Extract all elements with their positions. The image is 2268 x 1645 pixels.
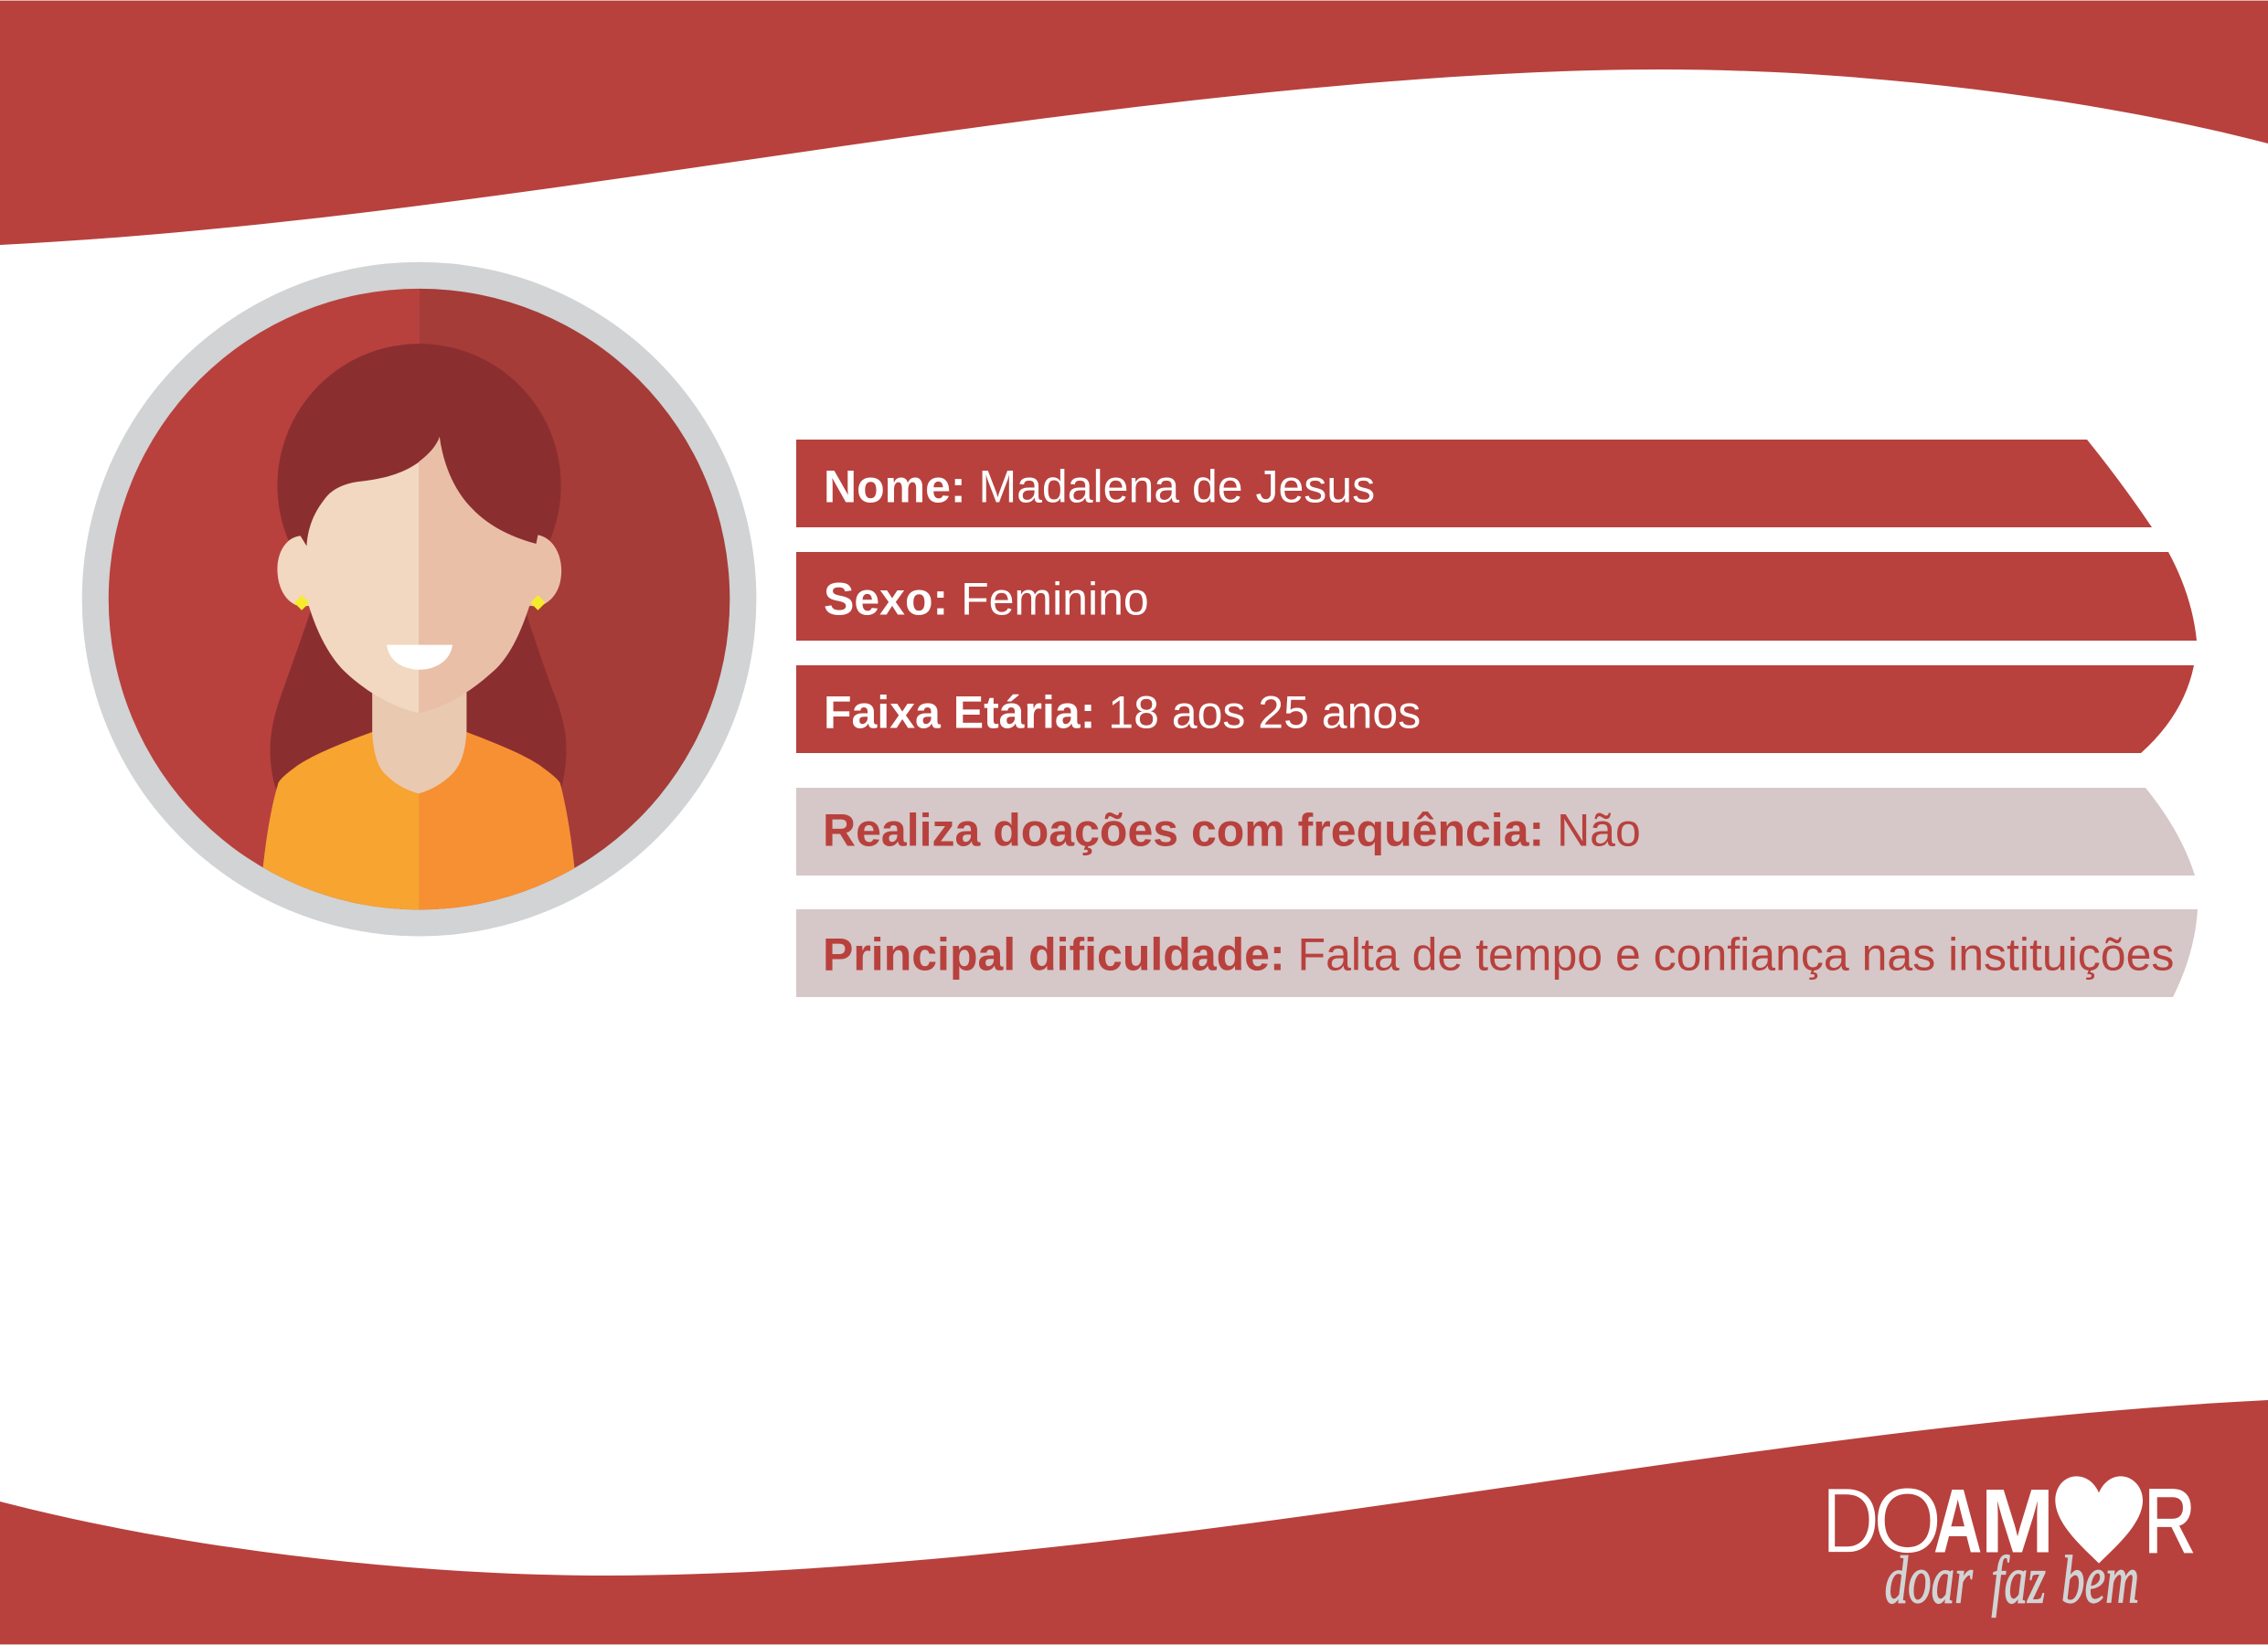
text: nome: Nome: Madalena de Jesus: [824, 461, 1375, 512]
icon: heart: [2055, 1476, 2143, 1564]
panel: frequencia de doacoes: [796, 788, 2195, 876]
panel: faixa etaria: [796, 665, 2194, 753]
text: faixa etaria: Faixa Etária: 18 aos 25 anos: [824, 687, 1421, 738]
logo wordmark: A: [1933, 1470, 1982, 1572]
logo tagline: bem: [2061, 1542, 2139, 1618]
logo wordmark: D: [1821, 1469, 1879, 1573]
bottom wave banner: [0, 1400, 2268, 1645]
avatar frame ring: [82, 262, 756, 936]
logo wordmark: R: [2144, 1470, 2196, 1572]
text: sexo: Sexo: Feminino: [824, 574, 1149, 625]
logo wordmark: M: [1981, 1470, 2054, 1572]
panel: nome: [796, 440, 2152, 527]
logo wordmark: [1821, 1469, 2196, 1573]
logo: Doamor: [1821, 1469, 2196, 1618]
logo wordmark: O: [1873, 1469, 1943, 1573]
avatar: woman in circular frame: [73, 256, 765, 947]
text: principal dificuldade: Principal dificuldade: Falta de tempo e confiança nas instituições: [823, 929, 2174, 980]
avatar illustration: [108, 289, 729, 910]
logo tagline: faz: [1991, 1542, 2046, 1618]
panel: principal dificuldade: [796, 909, 2198, 997]
text: frequencia de doacoes: Realiza doações com frequência: Não: [823, 804, 1641, 855]
logo tagline: doar: [1885, 1542, 1973, 1618]
panel: sexo: [796, 552, 2197, 641]
top wave banner: [0, 0, 2268, 245]
